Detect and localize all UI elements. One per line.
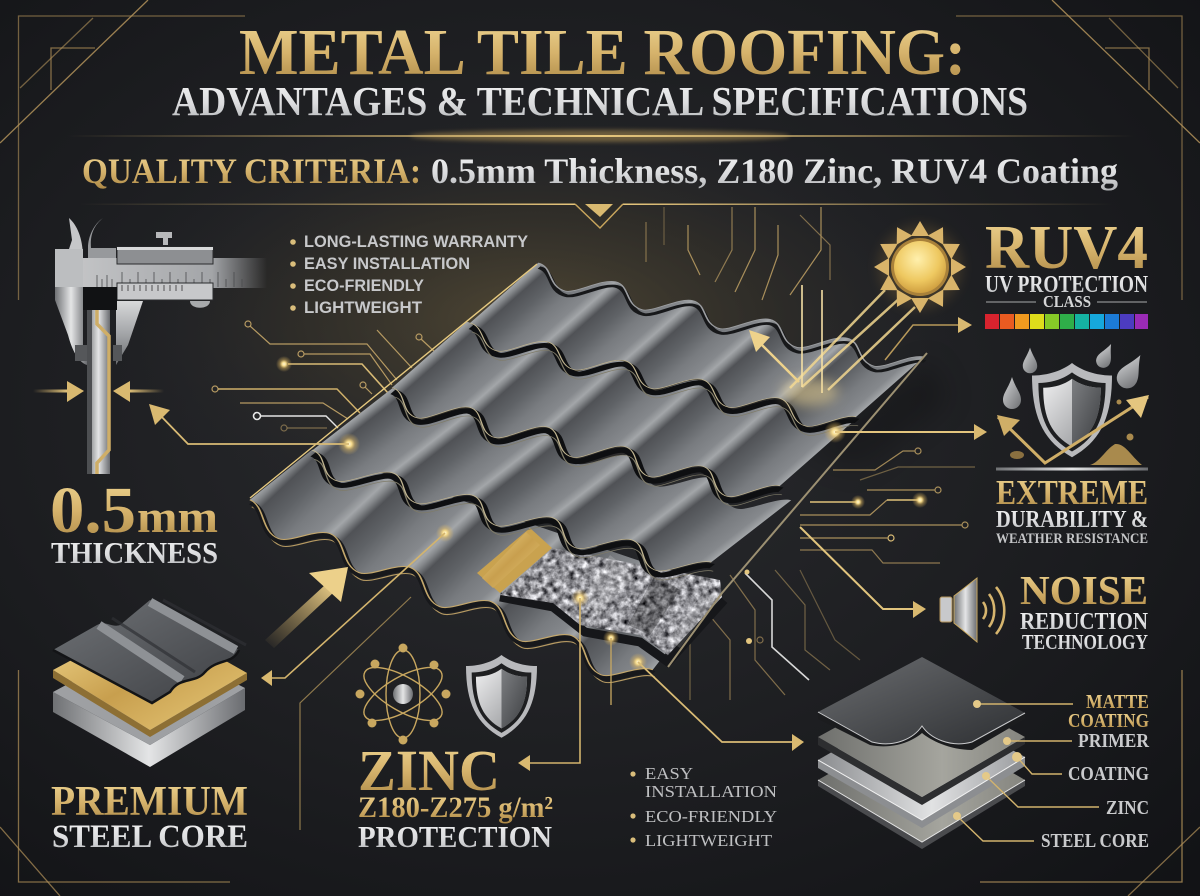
layer labels: COATING	[1068, 763, 1149, 785]
icon: sheet thickness cross-section	[87, 310, 110, 474]
bottom tile course	[230, 424, 733, 695]
icon: steel core layers	[53, 600, 247, 767]
benefits list top: LIGHTWEIGHT	[304, 299, 422, 317]
sun rays	[749, 285, 915, 406]
premium steel core label: PREMIUM	[51, 779, 248, 825]
layer labels: COATING	[1068, 710, 1149, 732]
big arrow to roof	[265, 567, 348, 648]
benefits list top: ECO-FRIENDLY	[304, 277, 424, 295]
arrow: roof to layer stack	[629, 653, 804, 751]
zinc label: PROTECTION	[358, 819, 552, 854]
circuit traces top	[646, 207, 830, 300]
top tile course	[451, 263, 925, 443]
third tile course	[290, 388, 791, 589]
circuit traces bottom	[690, 570, 860, 700]
arrow: roof to durability	[824, 421, 987, 443]
title: ADVANTAGES & TECHNICAL SPECIFICATIONS	[172, 78, 1028, 124]
benefits list top: EASY INSTALLATION	[304, 255, 470, 273]
roof right edge	[668, 353, 927, 667]
icon: layer stack	[818, 657, 1025, 849]
noise label: TECHNOLOGY	[1022, 630, 1148, 654]
layer labels	[1041, 691, 1149, 852]
thickness arrows	[33, 381, 164, 402]
title	[172, 16, 1028, 124]
benefits list top: LONG-LASTING WARRANTY	[304, 233, 528, 251]
zinc label: Z180-Z275 g/m²	[358, 791, 553, 824]
quality criteria heading: 0.5mm Thickness, Z180 Zinc, RUV4 Coating	[431, 151, 1118, 191]
layer labels: ZINC	[1106, 797, 1149, 819]
icon: speaker	[940, 578, 1004, 642]
title: METAL TILE ROOFING:	[239, 16, 966, 89]
durability label	[996, 473, 1148, 547]
benefits list bottom: EASY	[645, 764, 693, 783]
arrow: roof to noise	[800, 527, 926, 618]
criteria divider with pointer	[80, 204, 1113, 228]
circuit traces right	[800, 448, 975, 563]
benefits list bottom: ECO-FRIENDLY	[645, 807, 777, 826]
arrow: roof to thickness	[149, 404, 360, 455]
circuit traces left	[212, 321, 435, 431]
zinc label	[358, 738, 553, 854]
benefits list bottom: LIGHTWEIGHT	[645, 831, 773, 850]
premium steel core label: STEEL CORE	[52, 819, 248, 855]
durability label: WEATHER RESISTANCE	[996, 531, 1148, 547]
layer leader lines	[953, 700, 1099, 841]
durability divider	[996, 468, 1148, 470]
metal tile roof sheet	[230, 263, 950, 695]
noise label: NOISE	[1020, 567, 1148, 613]
icon: zinc shield	[466, 655, 537, 738]
UV rainbow scale	[985, 314, 1148, 329]
benefits list bottom: INSTALLATION	[645, 782, 777, 801]
layer labels: STEEL CORE	[1041, 830, 1149, 852]
durability label: EXTREME	[996, 473, 1148, 512]
RUV4 label: RUV4	[985, 214, 1148, 282]
RUV4 label: CLASS	[1043, 292, 1091, 311]
second tile course	[371, 322, 855, 513]
icon: atom	[356, 644, 450, 744]
zinc label: ZINC	[358, 738, 500, 803]
exposed zinc layer	[500, 548, 724, 662]
premium steel core label	[51, 779, 248, 855]
benefits list top	[290, 233, 528, 317]
layer labels: MATTE	[1086, 691, 1149, 713]
icon: sun	[874, 221, 966, 313]
durability label: DURABILITY &	[996, 507, 1148, 533]
exposed gold layer	[477, 528, 552, 593]
thickness label: THICKNESS	[51, 535, 218, 570]
roof shadow	[800, 360, 950, 470]
quality criteria heading: QUALITY CRITERIA:	[82, 151, 421, 191]
layer labels: PRIMER	[1078, 730, 1149, 752]
icon: caliper	[55, 218, 267, 365]
arrow: coating to RUV4	[885, 317, 972, 360]
benefits list bottom	[630, 764, 777, 850]
noise label	[1020, 567, 1149, 654]
arrow: roof to steel core	[261, 524, 454, 830]
RUV4 label	[985, 214, 1149, 311]
noise label: REDUCTION	[1020, 609, 1149, 635]
roof left edge	[250, 264, 537, 498]
thickness label: 0.5	[50, 474, 136, 547]
thickness label	[50, 474, 218, 570]
glow dots on traces	[276, 356, 928, 509]
quality criteria heading	[82, 151, 1118, 191]
arrow: roof to zinc	[518, 589, 619, 771]
thickness label: mm	[137, 491, 218, 542]
RUV4 label: UV PROTECTION	[985, 272, 1149, 298]
icon: durability shield	[997, 341, 1149, 465]
title divider	[67, 130, 1135, 142]
